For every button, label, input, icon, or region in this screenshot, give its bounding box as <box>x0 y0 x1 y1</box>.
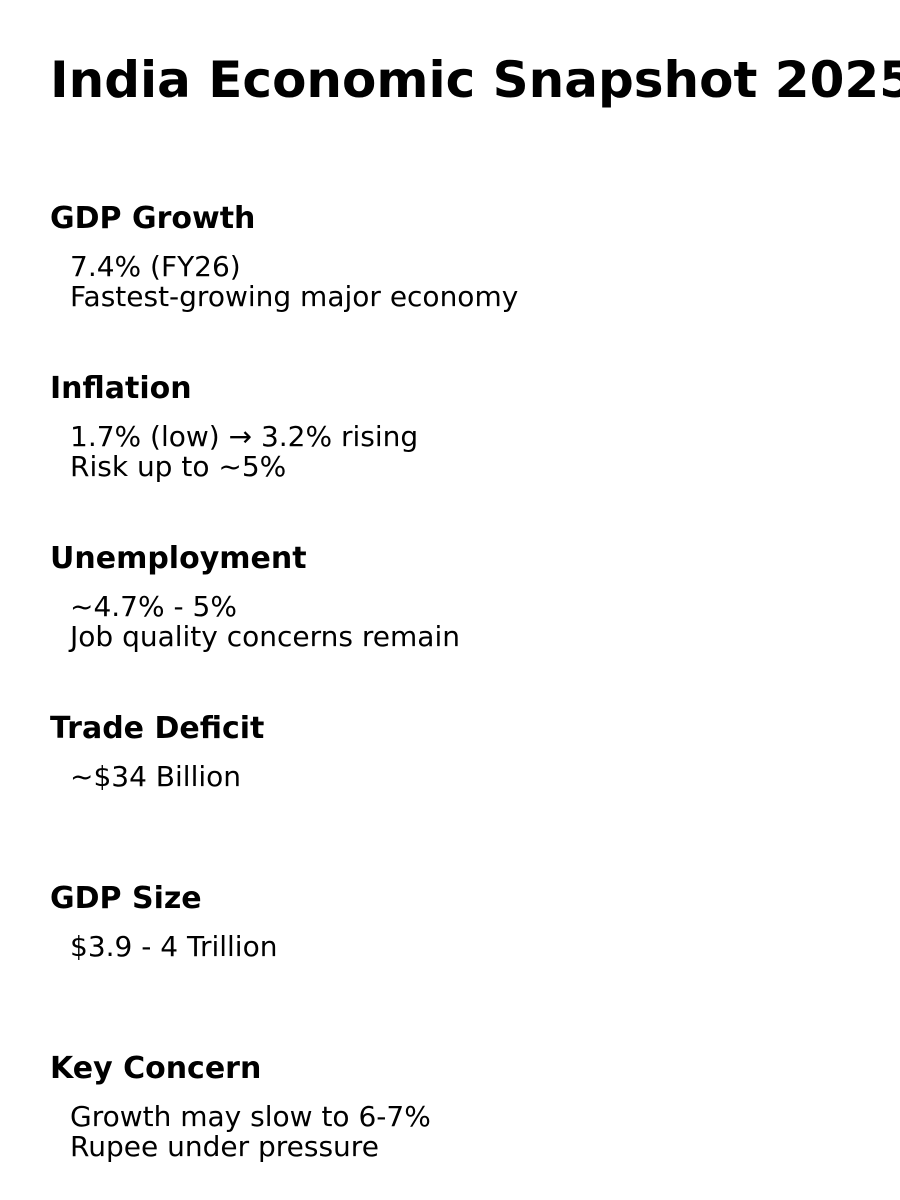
title: India Economic Snapshot 2025 <box>50 51 900 109</box>
section: Inflation <box>50 371 418 483</box>
heading: Trade Deficit: Trade Deficit <box>50 711 264 746</box>
heading: Key Concern: Key Concern <box>50 1051 261 1086</box>
section: Key Concern <box>50 1051 431 1163</box>
section: GDP Size <box>50 881 277 963</box>
text block: Unemployment details: Job quality concerns remain <box>68 620 460 653</box>
text block: Key Concern details <box>70 1100 431 1163</box>
text block: Unemployment details: ~4.7% - 5% <box>70 590 237 623</box>
heading: GDP Growth: GDP Growth <box>50 201 255 236</box>
text block: Inflation details: Risk up to ~5% <box>70 450 286 483</box>
text block: Inflation details <box>70 420 418 483</box>
heading: Unemployment: Unemployment <box>50 541 307 576</box>
text block: Inflation details: 1.7% (low) → 3.2% rising <box>70 420 418 453</box>
text block: Unemployment details <box>68 590 460 653</box>
heading: Inflation: Inflation <box>50 371 192 406</box>
text block: GDP Growth details <box>70 250 518 313</box>
text block: Trade Deficit details: ~$34 Billion <box>70 760 241 793</box>
section: GDP Growth <box>50 201 518 313</box>
text block: GDP Growth details: 7.4% (FY26) <box>70 250 241 283</box>
section: Unemployment <box>50 541 460 653</box>
text block: Key Concern details: Rupee under pressure <box>70 1130 379 1163</box>
text block: GDP Growth details: Fastest-growing major economy <box>70 280 518 313</box>
section: Trade Deficit <box>50 711 264 793</box>
text block: GDP Size details: $3.9 - 4 Trillion <box>70 930 277 963</box>
text block: Key Concern details: Growth may slow to 6-7% <box>70 1100 431 1133</box>
heading: GDP Size: GDP Size <box>50 881 202 916</box>
